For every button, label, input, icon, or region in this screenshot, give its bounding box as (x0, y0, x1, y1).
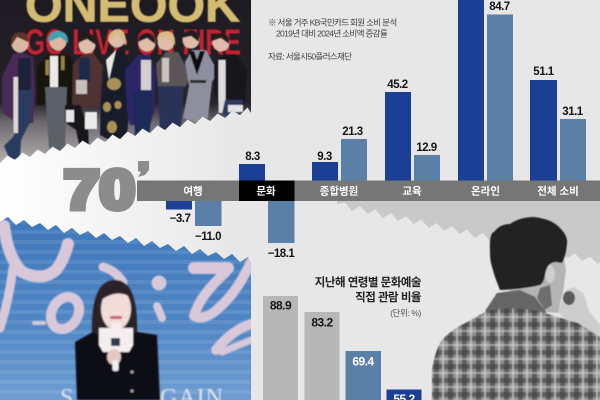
category: travel bars: −3.7 (170, 213, 190, 225)
glass in hand (563, 291, 575, 305)
photo: idol group on stage (0, 0, 251, 165)
category: general hospital bars (312, 126, 367, 182)
member 7 (182, 30, 218, 123)
category axis band (137, 180, 600, 201)
bar 69.4: 69.4 (352, 354, 375, 368)
category: total spending bars (530, 66, 586, 182)
chart title: attendance by age (315, 275, 422, 318)
microphone flag (99, 323, 133, 352)
member 3 (65, 33, 103, 148)
axis label: education: 교육 (402, 186, 422, 198)
hair (490, 217, 567, 290)
bar 88.9: 88.9 (270, 298, 292, 312)
member 5 (125, 33, 156, 137)
bar 55.2 (386, 390, 422, 400)
category: online bars (458, 0, 513, 182)
category: general hospital bars: 21.3 (342, 126, 363, 138)
category: total spending bars: 31.1 (562, 106, 584, 118)
highlighted culture cell (239, 180, 294, 201)
shirt collar (485, 290, 547, 313)
category: culture bars (239, 151, 295, 260)
source: 자료: 서울시50플러스재단 (268, 52, 352, 62)
axis label: online: 온라인 (471, 184, 500, 198)
member 6 (156, 31, 192, 133)
poster subtitle: GO LIVE ON FIRE (25, 22, 241, 62)
member 2 (37, 31, 73, 153)
ear (545, 265, 555, 283)
arm and hand (558, 287, 600, 345)
category: travel bars: −11.0 (195, 231, 221, 243)
apostrophe mark (138, 161, 149, 177)
neck and face (500, 258, 566, 313)
unit: (단위: %) (390, 308, 422, 318)
title line 2: 직접 관람 비율 (355, 291, 422, 304)
note and source text (268, 18, 397, 62)
note line 1: ※ 서울 거주 KB국민카드 회원 소비 분석 (268, 18, 397, 28)
bar 69.4 (346, 351, 381, 400)
bar 88.9 (263, 296, 298, 400)
category: general hospital bars: 9.3 (317, 151, 332, 163)
category: education bars (385, 79, 440, 182)
bar chart: spending change by category (166, 0, 586, 260)
grey zigzag backdrop (337, 201, 600, 264)
axis label: culture: 문화 (256, 184, 276, 198)
category: travel bars (166, 200, 222, 243)
note line 2: 2019년 대비 2024년 소비액 증감률 (276, 28, 388, 38)
bar 83.2 (304, 312, 340, 400)
singer figure (75, 280, 160, 400)
member 1 (2, 32, 35, 160)
axis label: total spending: 전체 소비 (537, 184, 579, 198)
category: culture bars: 8.3 (245, 151, 260, 163)
member 8 (212, 33, 247, 119)
category: online bars: 84.7 (489, 1, 510, 13)
photo: man from behind in plaid shirt (432, 217, 600, 400)
left light band (0, 100, 240, 270)
photo: singer on stage (0, 210, 251, 400)
bar chart: attendance by age (263, 296, 422, 400)
backdrop brush strokes (0, 226, 251, 352)
axis label: travel: 여행 (183, 184, 203, 198)
category: education bars: 45.2 (387, 79, 408, 91)
big age label: 70 (64, 158, 135, 220)
plaid shirt (432, 290, 600, 400)
category: total spending bars: 51.1 (533, 66, 555, 78)
category: education bars: 12.9 (416, 142, 437, 154)
axis label: general hospital: 종합병원 (320, 184, 358, 198)
bar 83.2: 83.2 (311, 316, 334, 330)
title line 1: 지난해 연령별 문화예술 (315, 275, 422, 289)
category: culture bars: −18.1 (268, 248, 295, 260)
member 4 (100, 29, 132, 143)
